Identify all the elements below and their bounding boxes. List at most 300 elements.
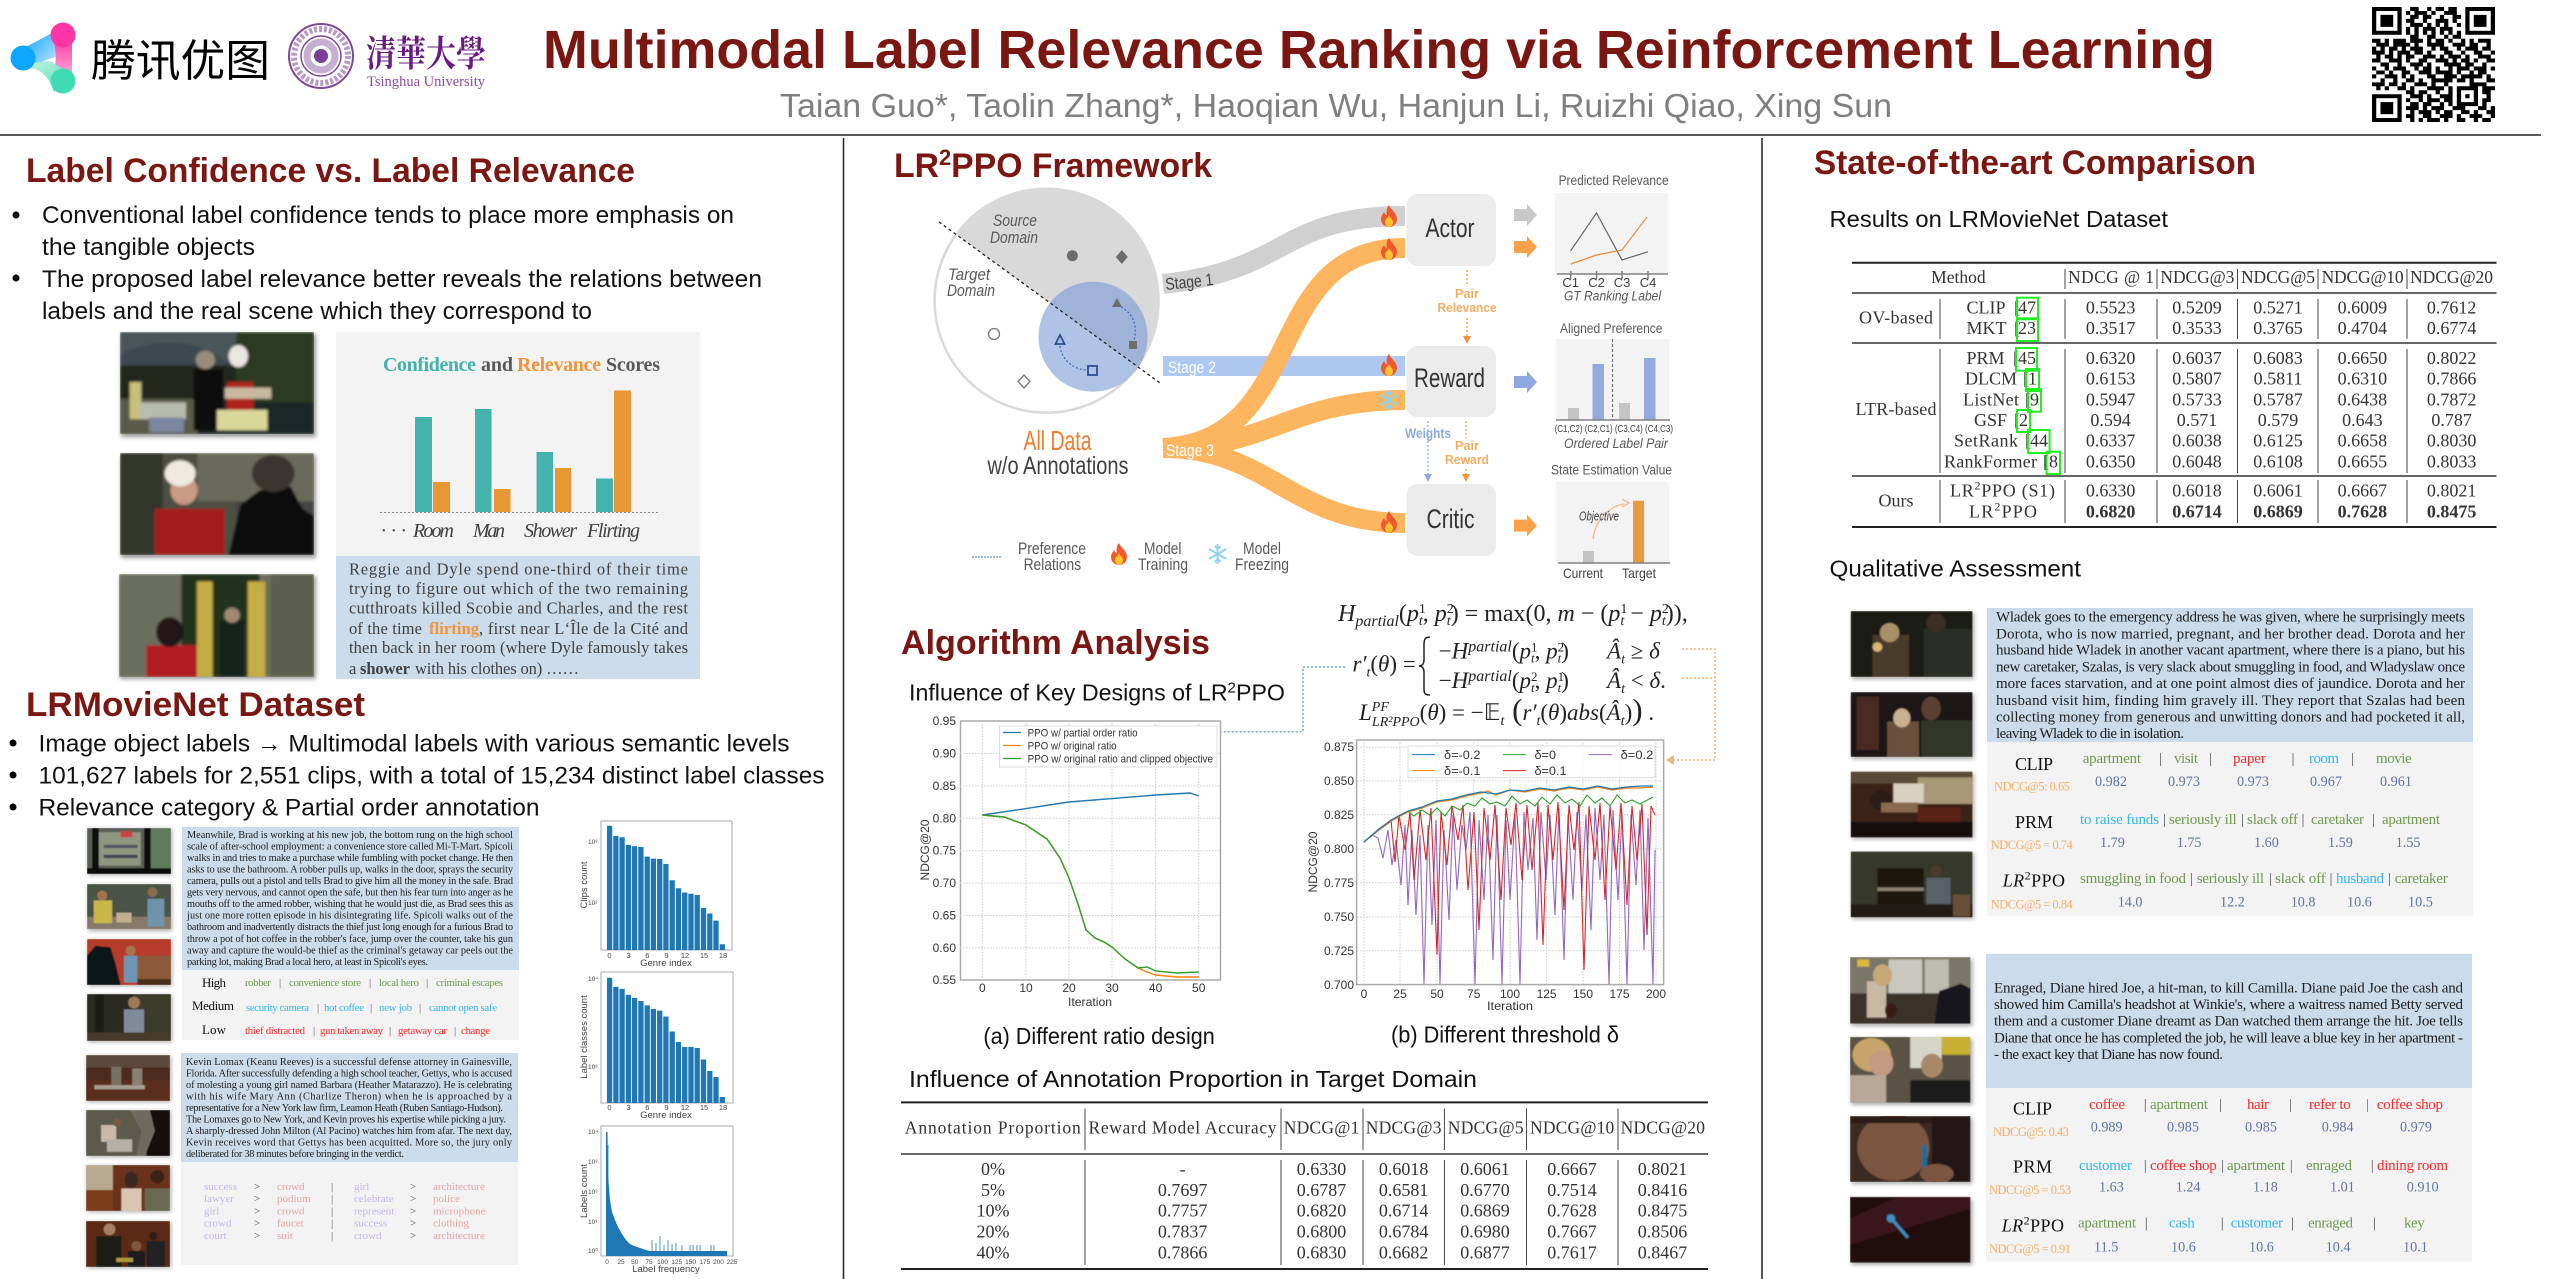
row: medium: security camera — [246, 1002, 309, 1014]
chart: state estimation value: Objective — [1579, 509, 1619, 524]
legend: chart a: PPO w/ partial order ratio — [1028, 728, 1138, 740]
partial order pairs: left column: girl — [204, 1206, 219, 1218]
row: high: High — [202, 975, 226, 990]
line chart a: different ratio design: 0.80 — [933, 811, 956, 825]
row: PRM: 1.01 — [2330, 1180, 2355, 1196]
line chart a: different ratio design: 40 — [1149, 981, 1163, 995]
row: PRM: PRM — [2015, 812, 2053, 832]
table row: 5%: 0.6581 — [1379, 1180, 1428, 1200]
scores: RankFormer — [2086, 451, 2476, 471]
scores: CLIP: 0.5271 — [2253, 297, 2303, 317]
row: CLIP: | — [2292, 751, 2295, 767]
row: LR2PPO: smuggling in food — [2080, 871, 2186, 887]
scores: LR2PPO: 0.6820 — [2086, 501, 2135, 521]
bars: Man — [475, 409, 510, 512]
histogram: clips count by genre: 15 — [700, 951, 708, 960]
scores: GSF: 0.579 — [2258, 410, 2298, 430]
method names: 44 — [2030, 431, 2048, 451]
scores: GSF: 0.594 — [2090, 410, 2131, 430]
histogram: label frequency: 75 — [645, 1259, 653, 1266]
table header: NDCG@20 — [2410, 267, 2493, 287]
row: PRM: seriously ill — [2169, 812, 2237, 828]
arrow: ratio formula to chart a — [1153, 667, 1345, 737]
formula: partial order ratio: t — [1621, 682, 1626, 697]
histogram: label frequency: 150 — [685, 1259, 696, 1266]
formula: objective: L — [1358, 700, 1372, 725]
image: film still, woman in court — [86, 1165, 171, 1212]
image: film still, man sleeping on sofa — [1851, 772, 1974, 839]
partial order pairs: right column — [354, 1181, 486, 1242]
QR code — [2372, 7, 2495, 122]
image: film still, curtained doorway — [119, 574, 316, 679]
text block: Kevin Lomax synopsis: with his wife Mary Ann (Charlize Theron) when he is approached by a — [186, 1092, 512, 1103]
header — [0, 9, 2541, 135]
histogram: label classes count by genre: 10⁴ — [588, 976, 598, 983]
histogram: label frequency: 10³ — [588, 1159, 598, 1166]
row: CLIP: 0.985 — [2245, 1120, 2277, 1136]
partial order pairs: left column: > — [254, 1206, 260, 1218]
formula: partial hinge loss: p — [1405, 601, 1419, 627]
text block: plot excerpt: Reggie and Dyle spend one-third of their time — [349, 560, 688, 578]
scores: SetRank — [2086, 431, 2476, 451]
box: critic: Critic — [1426, 504, 1474, 534]
method names: PPO — [2002, 501, 2037, 521]
row: CLIP: | — [2366, 1097, 2369, 1113]
scores: SetRank: 0.8030 — [2427, 431, 2476, 451]
bars: Room — [415, 417, 450, 512]
partial order pairs: right column: > — [410, 1206, 416, 1218]
scores: GSF: 0.643 — [2342, 410, 2383, 430]
table row: 20%: 20% — [976, 1222, 1010, 1242]
table header: Reward Model Accuracy — [1088, 1118, 1277, 1138]
subheading: qualitative assessment: Qualitative Assessment — [1830, 556, 2082, 582]
histogram: label frequency: 200 — [713, 1259, 724, 1266]
bullet list: 101,627 labels for 2,551 clips, with a total of 15,234 distinct label classes — [38, 763, 824, 790]
formula: partial order ratio: ( — [1512, 668, 1520, 693]
arrow: pair relevance: Relevance — [1438, 300, 1496, 315]
text block: Kevin Lomax synopsis: The Lomaxes go to New York, and Kevin proves his expertise while picking a jury. — [186, 1115, 506, 1126]
bars: Shower — [536, 452, 571, 512]
bullet list: Relevance category & Partial order annotation — [38, 794, 540, 822]
text block: Diane synopsis: - the exact key that Diane has now found. — [1994, 1047, 2223, 1063]
text block: Kevin Lomax synopsis — [181, 1053, 518, 1162]
row: LR2PPO: | — [2388, 871, 2391, 887]
heading: LRMovieNet Dataset — [26, 686, 365, 724]
scores: PRM: 0.6037 — [2172, 348, 2222, 368]
table row: 40%: 0.6877 — [1460, 1243, 1510, 1263]
formula: partial order ratio: Â — [1605, 668, 1622, 693]
formula: objective: r′ — [1522, 700, 1537, 725]
logo: Tsinghua seal — [289, 24, 353, 88]
text block: Kevin Lomax synopsis: of molesting a young girl named Barbara (Heather Matarazzo). He is celebrating — [186, 1080, 512, 1091]
histogram: label classes count by genre: 15 — [700, 1103, 708, 1112]
row: PRM: | — [2302, 812, 2305, 828]
formula: partial hinge loss: ( — [1399, 601, 1407, 627]
chart title: Scores — [606, 354, 660, 376]
text block: Brad synopsis — [182, 827, 519, 970]
histogram: label classes count by genre: 3 — [627, 1103, 631, 1112]
row: CLIP: 0.989 — [2091, 1120, 2123, 1136]
legend: chart b: δ=0 — [1534, 748, 1556, 762]
text block: Wladek synopsis: Wladek goes to the emergency address he was given, where he surprisingly meets — [1996, 610, 2465, 626]
table header: Annotation Proportion — [905, 1118, 1081, 1138]
panel: confidence and relevance bar chart — [336, 332, 700, 556]
row: CLIP: | — [2351, 751, 2354, 767]
formula: partial hinge loss: 1 — [1620, 602, 1627, 617]
text block: plot excerpt: of the time — [349, 619, 422, 638]
row: PRM — [1989, 1157, 2448, 1197]
chart title: Relevance — [517, 354, 601, 376]
method names: [ — [2025, 389, 2031, 409]
legend: chart b: δ=0.2 — [1621, 748, 1654, 762]
row: LR2PPO: NDCG@5 = 0.91 — [1989, 1242, 2071, 1256]
diagram: source and target domains — [935, 189, 1160, 413]
row: low: | — [389, 1025, 391, 1037]
text block: plot excerpt: with his clothes on) …… — [415, 659, 579, 678]
method names: PPO (S1) — [1981, 481, 2055, 502]
row: CLIP: 0.985 — [2167, 1120, 2199, 1136]
partial order pairs: right column: architecture — [433, 1230, 485, 1242]
row: medium: | — [317, 1002, 319, 1014]
row: PRM: 1.18 — [2253, 1180, 2278, 1196]
arrow: actor to predicted relevance (orange) — [1514, 236, 1537, 258]
histogram: label classes count by genre: Genre index — [640, 1110, 692, 1121]
table row: 5% — [981, 1180, 1687, 1200]
image: film still, store counter — [87, 884, 172, 931]
row: CLIP: | — [2289, 1097, 2292, 1113]
chart: predicted relevance — [1555, 172, 1669, 304]
row: CLIP — [1993, 1097, 2443, 1139]
row: CLIP: CLIP — [2015, 754, 2053, 774]
chart: aligned preference: (C1,C2) (C2,C1) (C3,C4) (C4,C3) — [1555, 424, 1673, 435]
formula: partial order ratio: δ. — [1649, 668, 1666, 693]
partial order pairs: right column: success — [354, 1218, 387, 1230]
panel: label confidence vs label relevance — [12, 152, 762, 679]
formula: partial order ratio: ) — [1561, 668, 1569, 693]
histogram: label frequency: 0 — [605, 1259, 609, 1266]
row: PRM: | — [2163, 812, 2166, 828]
formula: partial order ratio: δ — [1649, 638, 1660, 664]
line chart a: different ratio design: 50 — [1192, 981, 1206, 995]
row: CLIP: hair — [2247, 1097, 2269, 1113]
formula: objective: t — [1501, 714, 1506, 729]
text block: Diane synopsis: them and a customer Diane dreamt as Dan watched them arrange the hit. Joe tells — [1994, 1014, 2463, 1030]
text block: Diane synopsis — [1986, 954, 2472, 1088]
citation highlight boxes — [2016, 298, 2060, 474]
line chart a: different ratio design: 0.65 — [933, 908, 956, 922]
row: CLIP: coffee — [2089, 1097, 2125, 1113]
axis labels: Shower — [524, 520, 577, 542]
method names: 2 — [1994, 499, 2000, 513]
row: medium: | — [370, 1002, 372, 1014]
scores: GSF — [2090, 410, 2472, 430]
row: LR2PPO: | — [2373, 1216, 2376, 1232]
formula: partial order ratio: r′ — [1352, 652, 1367, 676]
line chart a: different ratio design: Iteration — [1068, 995, 1112, 1009]
method names — [1944, 297, 2058, 521]
arrow: weights: Weights — [1405, 425, 1451, 441]
histogram: label classes count by genre: 0 — [607, 1103, 611, 1112]
row: PRM: | — [2241, 812, 2244, 828]
row: LR2PPO: 10.6 — [2249, 1240, 2274, 1256]
method names: [ — [2014, 410, 2020, 430]
table row: 20% — [976, 1222, 1687, 1242]
formula: partial hinge loss: t — [1662, 614, 1667, 629]
scores: ListNet: 0.7872 — [2427, 389, 2476, 409]
formula: objective: θ)abs(Â — [1548, 700, 1621, 725]
scores: SetRank: 0.6337 — [2086, 431, 2135, 451]
method names: [ — [2014, 318, 2020, 338]
histogram: label frequency: 175 — [699, 1259, 711, 1266]
bullet list — [10, 731, 824, 822]
chart: predicted relevance: C4 — [1640, 275, 1656, 290]
table header: NDCG@3 — [2160, 267, 2235, 287]
row: LR2PPO: 2 — [2025, 869, 2031, 883]
row: LR2PPO: enraged — [2308, 1216, 2354, 1232]
scores: MKT: 0.6774 — [2427, 318, 2476, 338]
line chart b: different threshold: 50 — [1430, 987, 1444, 1001]
formula: partial order ratio: 1 — [1558, 669, 1564, 684]
table row: 5%: 0.8416 — [1638, 1180, 1687, 1200]
table row: 0%: 0% — [981, 1159, 1005, 1179]
row: LR2PPO: | — [2221, 1216, 2224, 1232]
partial order pairs: left column: > — [254, 1181, 260, 1193]
row: LR2PPO: slack off — [2275, 871, 2326, 887]
flow: stage 2: Stage 2 — [1168, 358, 1216, 377]
method names: 47 — [2018, 297, 2036, 317]
row: CLIP: | — [2144, 1097, 2147, 1113]
scores: PRM: 0.6650 — [2338, 348, 2387, 368]
row: low: | — [313, 1025, 315, 1037]
table row: 0%: - — [1180, 1159, 1186, 1179]
authors: Taian Guo*, Taolin Zhang*, Haoqian Wu, Hanjun Li, Ruizhi Qiao, Xing Sun — [780, 87, 1892, 124]
method names: RankFormer — [1944, 451, 2037, 471]
histogram: label frequency: 10¹ — [588, 1219, 598, 1226]
row: LR2PPO: PPO — [2030, 1216, 2064, 1236]
scores: LR2PPO S1: 0.6061 — [2253, 481, 2303, 501]
row: LR2PPO: | — [2190, 871, 2193, 887]
text block: Brad synopsis: camera, pulls out a pistol and tells Brad to give him all the money in the safe. Brad — [187, 876, 514, 887]
scores: LR2PPO: 0.6869 — [2253, 501, 2303, 521]
label: all data without annotations — [987, 425, 1128, 480]
partial order pairs: right column: police — [433, 1193, 460, 1205]
formula: partial order ratio: ( — [1370, 652, 1378, 676]
line chart b: different threshold: NDCG@20 — [1306, 831, 1320, 892]
histogram: label frequency: 10⁰ — [588, 1247, 598, 1255]
arrow: pair relevance: Pair — [1455, 286, 1479, 301]
line chart b: different threshold: 75 — [1467, 987, 1481, 1001]
label: target domain: Target — [948, 265, 991, 284]
table row: 40%: 0.7866 — [1158, 1243, 1207, 1263]
histogram: clips count by genre: 0 — [607, 951, 611, 960]
text block: Brad synopsis: scale of after-school employment: a convenience store called Mi-T-Mart. Spicoli — [187, 842, 513, 852]
subheading: annotation proportion: Influence of Annotation Proportion in Target Domain — [909, 1066, 1477, 1092]
chart: predicted relevance: C3 — [1614, 275, 1630, 290]
row: PRM: 1.59 — [2328, 835, 2353, 851]
text block: plot excerpt: trying to figure out which of the two remaining — [349, 579, 688, 598]
label: source domain: Domain — [990, 228, 1038, 247]
row: low: Low — [202, 1022, 227, 1037]
row: LR2PPO: 14.0 — [2118, 895, 2143, 911]
legend: chart a: PPO w/ original ratio — [1028, 740, 1117, 752]
row: LR2PPO: 10.4 — [2326, 1240, 2351, 1256]
scores: GSF: 0.787 — [2431, 410, 2472, 430]
scores: SetRank: 0.6038 — [2172, 431, 2222, 451]
row: CLIP: 0.967 — [2310, 774, 2342, 790]
partial order pairs: left column: crowd — [204, 1218, 232, 1230]
line chart b: different threshold: 0.700 — [1324, 978, 1354, 992]
method names: [ — [2043, 451, 2049, 471]
line chart b: different threshold: 100 — [1500, 987, 1520, 1001]
partial order pairs: left column: crowd — [277, 1206, 305, 1218]
chart: state estimation value: Current — [1563, 565, 1603, 581]
row: PRM: 1.24 — [2176, 1180, 2201, 1196]
row: PRM: slack off — [2247, 812, 2298, 828]
table row: 20%: 0.8506 — [1638, 1222, 1687, 1242]
method names: 1 — [2028, 369, 2037, 389]
row: medium: Medium — [192, 998, 234, 1013]
scores: LR2PPO: 0.7628 — [2338, 501, 2387, 521]
formula: partial order ratio: −H — [1439, 668, 1468, 693]
arrow: pair relevance — [1436, 270, 1498, 344]
formula: partial order ratio: t — [1558, 680, 1562, 695]
scores: PRM: 0.6320 — [2086, 348, 2135, 368]
row: medium: cannot open safe — [429, 1002, 497, 1014]
scores: MKT: 0.3517 — [2086, 318, 2135, 338]
text block: Brad synopsis: just one more rotten episode in his disintegrating life. Spicoli walks out of the — [186, 911, 513, 922]
formula: objective: LR²PPO — [1371, 715, 1420, 730]
row: CLIP: | — [2209, 751, 2212, 767]
legend: chart b: δ=-0.2 — [1444, 748, 1481, 762]
formula: partial hinge loss: 1 — [1419, 602, 1426, 617]
row: PRM: | — [2372, 812, 2375, 828]
row: low: thief distracted — [245, 1025, 306, 1037]
text block: plot excerpt: , first near L‘Île de la Cité and — [479, 619, 689, 638]
row: PRM: caretaker — [2311, 812, 2364, 828]
scores: CLIP: 0.5523 — [2086, 297, 2135, 317]
histogram: label frequency: 50 — [631, 1259, 639, 1266]
row: PRM: 1.55 — [2396, 835, 2421, 851]
formula: partial order ratio: p — [1518, 668, 1531, 693]
row: medium — [192, 998, 497, 1014]
row: low: gun taken away — [320, 1025, 384, 1037]
partial order pairs: left column: | — [331, 1193, 333, 1205]
line chart a: different ratio design: 20 — [1062, 981, 1076, 995]
row: LR2PPO: | — [2145, 1216, 2148, 1232]
formula: partial order ratio: p — [1544, 668, 1558, 693]
line chart b: different threshold: 0.850 — [1324, 774, 1354, 788]
scores: CLIP — [2086, 297, 2476, 317]
row: CLIP: apartment — [2083, 751, 2142, 767]
chart title — [383, 354, 660, 376]
scores: LR2PPO S1: 0.8021 — [2427, 481, 2476, 501]
formula: partial order ratio: ( — [1512, 638, 1520, 664]
line chart a: different ratio design: 30 — [1105, 981, 1119, 995]
table row: 10%: 0.6869 — [1460, 1201, 1510, 1221]
chart: state estimation value: Target — [1622, 565, 1656, 581]
scores: DLCM: 0.6153 — [2086, 369, 2135, 389]
text block: Kevin Lomax synopsis: Kevin Lomax (Keanu Reeves) is a successful defense attorney in Gainesville, — [186, 1057, 512, 1068]
row: CLIP: 0.961 — [2380, 774, 2412, 790]
formula: objective: ( — [1420, 700, 1427, 725]
panel: relevance category labels — [182, 970, 519, 1040]
row: LR2PPO: apartment — [2078, 1216, 2137, 1232]
row: PRM — [1991, 812, 2441, 852]
histogram: label frequency: 25 — [617, 1259, 625, 1266]
method names: 45 — [2018, 348, 2036, 368]
line chart b: different threshold: 125 — [1537, 987, 1557, 1001]
row: PRM: apartment — [2227, 1158, 2286, 1174]
row: LR2PPO — [1989, 1214, 2428, 1256]
arrow: pair reward: Pair — [1455, 438, 1479, 453]
scores: PRM — [2086, 348, 2476, 368]
panel: ranked labels example 2 — [1986, 1088, 2472, 1262]
table row: 0%: 0.8021 — [1638, 1159, 1687, 1179]
row: LR2PPO: seriously ill — [2197, 871, 2264, 887]
logo text: Tsinghua University: Tsinghua University — [367, 74, 485, 90]
text block: Wladek synopsis: leaving Wladek to die in isolation. — [1996, 726, 2184, 742]
text block: Brad synopsis: parking lot, making Brad a local hero, at least in Spicoli's eyes. — [187, 957, 428, 968]
heading: LR — [894, 147, 939, 185]
line chart a: different ratio design: 0.55 — [933, 973, 956, 987]
text block: Wladek synopsis: collecting money from generous and unwitting donors and had pocketed it all, — [1996, 710, 2465, 726]
line chart b: different threshold: 0.800 — [1324, 842, 1354, 856]
histogram: label frequency: 10² — [588, 1189, 598, 1196]
partial order pairs: left column: > — [254, 1193, 260, 1205]
row: PRM: coffee shop — [2150, 1158, 2217, 1174]
image: film still, woman and man in cafe — [1850, 1037, 1972, 1105]
formula: partial order ratio: p — [1544, 638, 1558, 664]
panel: ranked labels example 1 — [1987, 742, 2473, 916]
legend: framework — [972, 539, 1289, 574]
table row: 40%: 0.6830 — [1297, 1243, 1346, 1263]
group labels: LTR-based — [1856, 399, 1936, 419]
formula: partial hinge loss: 2 — [1447, 602, 1454, 617]
legend: framework: Relations — [1024, 555, 1081, 574]
formula: partial order ratio: 1 — [1531, 640, 1538, 654]
table row: 10%: 0.6820 — [1297, 1201, 1346, 1221]
scores: LR2PPO — [2086, 501, 2476, 521]
row: CLIP: NDCG@5: 0.43 — [1993, 1125, 2069, 1139]
table header: NDCG@10 — [1530, 1118, 1615, 1138]
formula: partial order ratio: < — [1625, 668, 1649, 693]
image: film still, courtroom — [86, 1055, 171, 1102]
row: low: getaway car — [398, 1025, 447, 1037]
formula: partial order ratio: t — [1366, 666, 1371, 680]
row: CLIP: 0.979 — [2400, 1120, 2432, 1136]
scores: MKT: 0.4704 — [2338, 318, 2387, 338]
scores: DLCM — [2086, 369, 2476, 389]
row: LR2PPO: PPO — [2031, 871, 2065, 891]
subheading: key designs: 2 — [1228, 680, 1236, 696]
row: high: | — [279, 977, 281, 989]
line chart a: different ratio design: 0 — [979, 981, 986, 995]
image: film still, man at desk — [86, 1110, 171, 1157]
panel: partial order labels — [181, 1162, 518, 1265]
text block: Diane synopsis: showed him Camilla's headshot at Winkie's, where a waitress named Betty served — [1994, 997, 2464, 1013]
image: film still, men in court — [86, 1221, 171, 1268]
table row: 10% — [976, 1201, 1687, 1221]
row: PRM: 1.60 — [2254, 835, 2279, 851]
table row: 5%: 0.7514 — [1547, 1180, 1597, 1200]
method names: [ — [2014, 297, 2020, 317]
row: medium: new job — [379, 1002, 412, 1014]
table row: 0%: 0.6667 — [1547, 1159, 1597, 1179]
method names: 2 — [1975, 479, 1981, 493]
text block: Brad synopsis: walks in and tries to make a purchase while fumbling with pocket change. He then — [187, 853, 513, 864]
scores: DLCM: 0.5807 — [2172, 369, 2222, 389]
formula: objective: ( — [1540, 700, 1548, 725]
